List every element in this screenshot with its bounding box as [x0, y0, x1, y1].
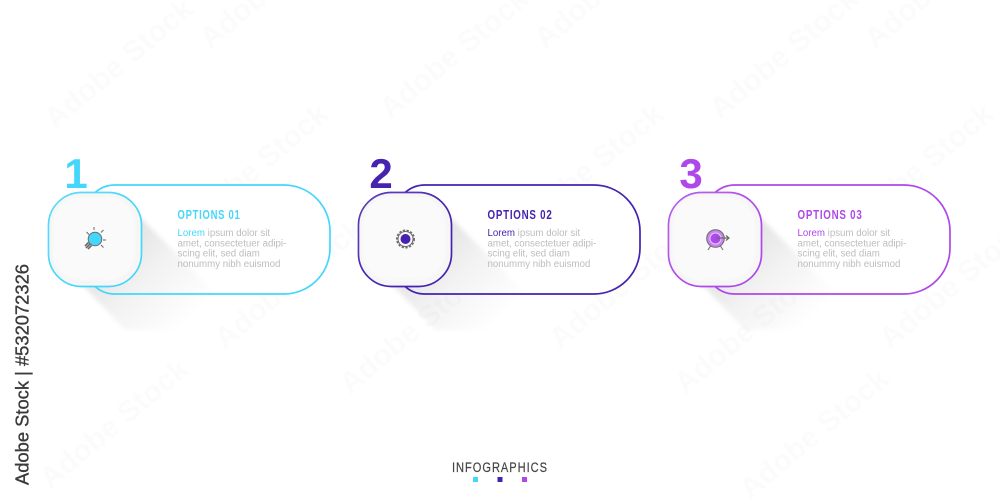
long shadow: [80, 212, 215, 330]
body text: amet, consectetuer adipi-: [178, 238, 286, 249]
body text: nonummy nibh euismod: [488, 259, 590, 270]
pill background: [395, 185, 640, 294]
body text: nonummy nibh euismod: [798, 259, 900, 270]
pill background: [705, 185, 950, 294]
outline pill: [395, 185, 640, 294]
watermark: Adobe Stock: [508, 97, 670, 240]
body text: nonummy nibh euismod: [178, 259, 280, 270]
watermark: Adobe Stock: [838, 97, 1000, 240]
icon: gear: [397, 230, 414, 248]
body text: scing elit, sed diam: [488, 249, 570, 260]
heading: OPTIONS 01: [178, 207, 240, 222]
body text: [178, 228, 286, 270]
number 3: 3: [679, 150, 703, 197]
watermark: Adobe Stock: [33, 352, 195, 495]
heading: OPTIONS 03: [798, 207, 862, 222]
body text: [798, 228, 906, 270]
number 1: 1: [64, 150, 88, 197]
footer legend squares: [473, 477, 527, 482]
rounded square card: [668, 192, 762, 286]
body text: Lorem ipsum dolor sit: [178, 228, 270, 239]
icon: light bulb: [85, 227, 106, 249]
watermark: Adobe Stock: [173, 97, 335, 240]
heading: OPTIONS 02: [488, 207, 552, 222]
pill background: [85, 185, 330, 294]
body text: amet, consectetuer adipi-: [488, 238, 596, 249]
watermark: Adobe Stock: [668, 257, 830, 400]
number 2: 2: [369, 150, 393, 197]
watermark: Adobe Stock: [543, 212, 705, 355]
watermark: Adobe Stock: [333, 257, 495, 400]
body text: scing elit, sed diam: [178, 249, 260, 260]
option 1: [48, 150, 330, 330]
stock id caption: Adobe Stock | #532072326: [12, 264, 32, 485]
long shadow: [390, 212, 525, 330]
option 3: [668, 150, 950, 330]
icon: target: [707, 230, 729, 250]
rounded square card: [358, 192, 452, 286]
watermark: Adobe Stock: [208, 212, 370, 355]
option 2: [358, 150, 640, 330]
outline pill: [705, 185, 950, 294]
long shadow: [700, 212, 835, 330]
outline pill: [85, 185, 330, 294]
body text: Lorem ipsum dolor sit: [488, 228, 580, 239]
footer title: INFOGRAPHICS: [452, 460, 548, 475]
rounded square card: [48, 192, 142, 286]
body text: amet, consectetuer adipi-: [798, 238, 906, 249]
body text: Lorem ipsum dolor sit: [798, 228, 890, 239]
body text: [488, 228, 596, 270]
body text: scing elit, sed diam: [798, 249, 880, 260]
